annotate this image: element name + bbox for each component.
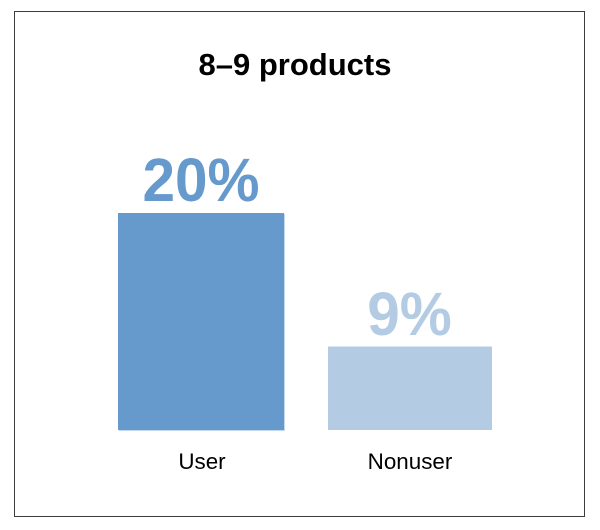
label: Nonuser: Nonuser <box>368 449 452 474</box>
value: Nonuser 9%: 9% <box>367 280 452 349</box>
title: 8–9 products <box>199 47 391 82</box>
bar: Nonuser <box>328 347 492 430</box>
value: User 20%: 20% <box>142 146 260 215</box>
bar: User <box>118 213 284 430</box>
label: User: User <box>178 449 226 474</box>
